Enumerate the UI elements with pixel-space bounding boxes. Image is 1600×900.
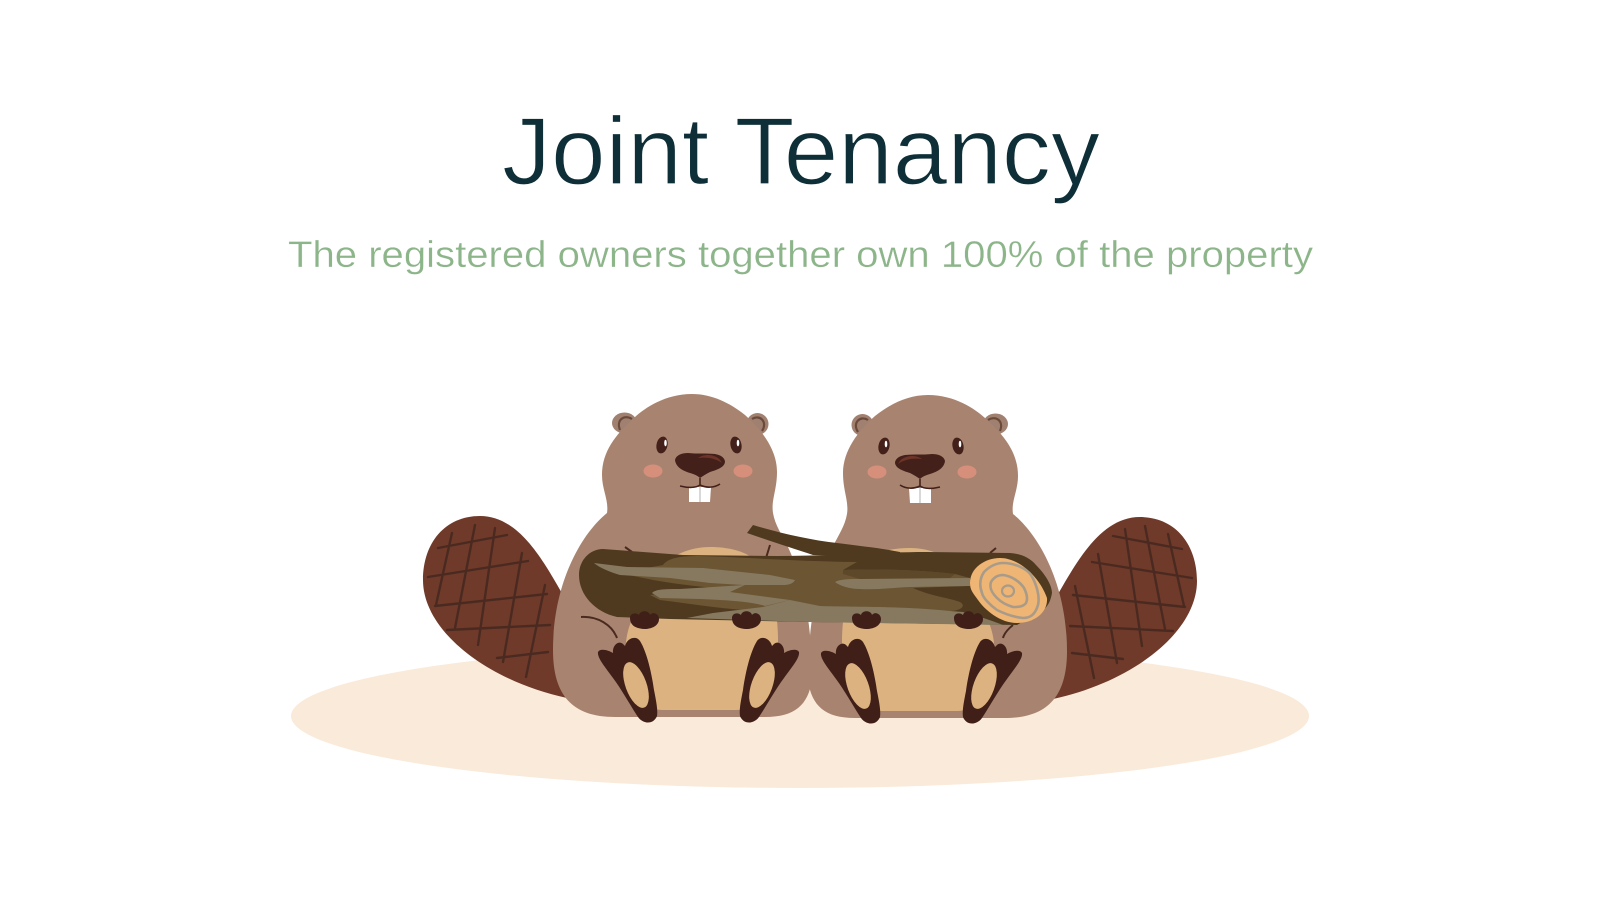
paw 1: [630, 611, 659, 629]
paw 4: [954, 611, 983, 629]
teeth: [689, 487, 711, 502]
ground ellipse: [291, 644, 1309, 788]
right beaver: [808, 395, 1197, 724]
nose and mouth: [895, 454, 945, 488]
bark mid tone: [620, 556, 970, 611]
foot, viewer's left: [821, 639, 880, 724]
eyes: [877, 437, 965, 455]
paws: [630, 611, 983, 629]
right tail: [1048, 517, 1197, 699]
left ear, viewer's left: [612, 412, 637, 434]
branch: [747, 525, 900, 558]
eyes: [655, 436, 743, 454]
bark light streaks: [594, 563, 1003, 625]
cheeks: [868, 466, 976, 478]
belly: [842, 548, 995, 711]
log: [579, 525, 1052, 625]
left beaver: [423, 394, 812, 723]
teeth: [909, 488, 931, 503]
right foot: [740, 638, 799, 723]
cheeks: [644, 464, 752, 478]
ear, viewer's left: [852, 414, 874, 436]
log trunk: [579, 549, 1052, 625]
arm lines: [990, 548, 1013, 638]
nose and mouth: [675, 453, 725, 487]
ear, viewer's right: [983, 414, 1008, 434]
paw 3: [852, 611, 881, 629]
arm lines: [581, 545, 770, 638]
log cut end: [970, 558, 1047, 623]
bark darker strip: [843, 569, 955, 579]
belly: [625, 547, 778, 710]
subtitle: The registered owners together own 100% of the property: [288, 234, 1314, 275]
left foot: [598, 638, 657, 723]
title: Joint Tenancy: [502, 98, 1100, 205]
foot, viewer's right: [963, 639, 1022, 724]
paw 2: [732, 611, 761, 629]
left tail: [423, 516, 572, 698]
body and head: [553, 394, 812, 717]
right ear, viewer's right: [746, 413, 768, 435]
body and head: [808, 395, 1067, 718]
